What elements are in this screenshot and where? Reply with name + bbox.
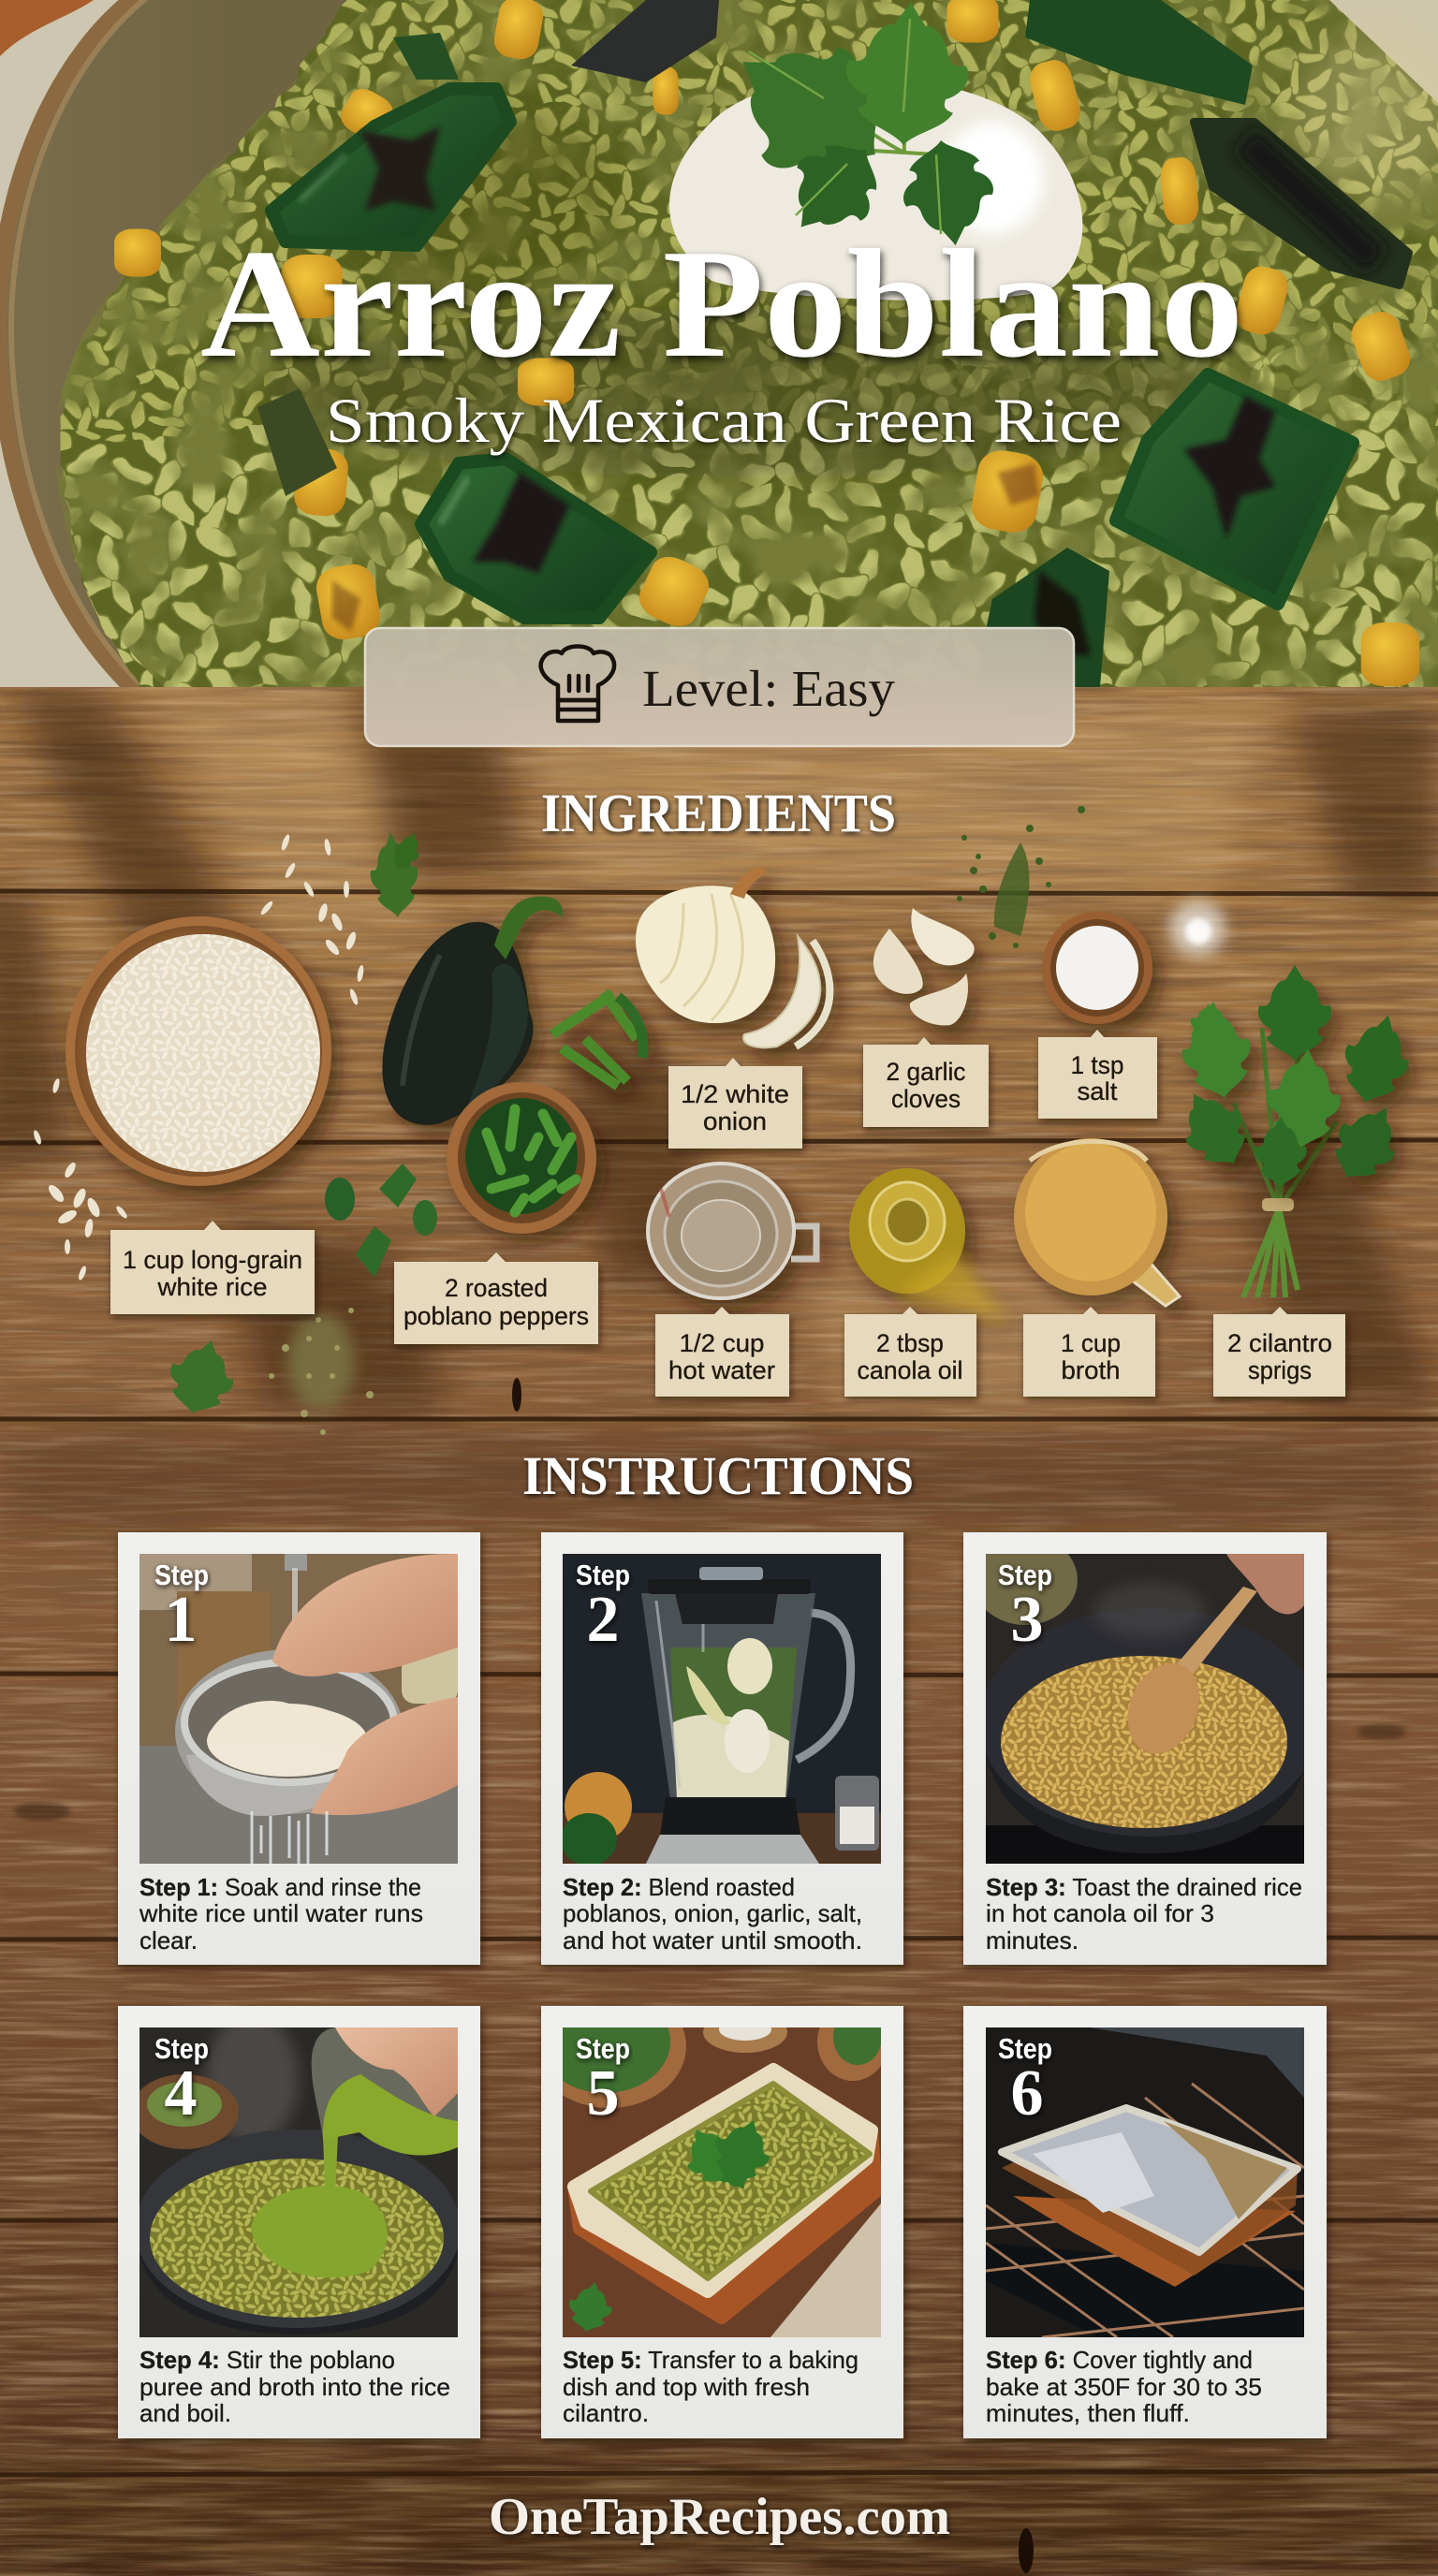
cilantro garnish [703,0,1001,255]
step text: and hot water until smooth. [563,1926,862,1954]
step text: clear. [139,1926,198,1954]
step badge: 6 [1011,2057,1043,2130]
step text: Step 1: Soak and rinse the [139,1873,421,1901]
level text: Level: Easy [642,660,896,717]
canola oil dish [849,1168,1006,1320]
small pepper pieces [325,1164,437,1278]
label: broth [1023,1307,1155,1397]
corn kernels [114,0,1419,689]
hero photo: green rice bowl [0,0,1438,739]
step 1 card [118,1532,480,1965]
step badge: Step [154,2032,209,2065]
step badge [154,2032,209,2130]
label: hot water: hot water [668,1356,775,1384]
label: canola oil [844,1307,976,1397]
ingredient photos [32,806,1420,1435]
ingredient labels [110,1030,1345,1397]
measuring cup of water [648,1164,816,1298]
label: salt [1038,1030,1157,1119]
step text: Step 6: Cover tightly and [986,2346,1253,2374]
footer website: OneTapRecipes.com [489,2488,950,2546]
label: poblano: 2 roasted [445,1274,548,1302]
label: onion: onion [703,1107,767,1135]
broth cup [1014,1138,1180,1306]
step text: cilantro. [563,2399,649,2427]
label: garlic: 2 garlic [886,1058,966,1086]
step 6 card [963,2006,1327,2438]
label: poblano: poblano peppers [404,1302,589,1330]
step badge: Step [998,1559,1052,1591]
step text: puree and broth into the rice [139,2373,450,2401]
step text: bake at 350F for 30 to 35 [986,2373,1262,2401]
halved onion [636,866,829,1047]
step badge: 4 [165,2057,197,2130]
step text: Step 4: Stir the poblano [139,2346,395,2374]
step badge [154,1559,209,1656]
label: broth: 1 cup [1061,1329,1121,1357]
step badge: Step [154,1559,209,1591]
step text [986,1873,1302,1954]
label: poblano [394,1252,598,1344]
label: salt: 1 tsp [1071,1051,1123,1079]
label: rice [110,1221,315,1314]
sliced chiles [552,992,643,1086]
bowl [0,0,468,693]
photo: rinsing rice [139,1554,458,1864]
photo: blender [563,1554,881,1864]
step text: minutes. [986,1926,1078,1954]
label: onion: 1/2 white [681,1080,789,1108]
step text: and boil. [139,2399,231,2427]
label: cilantro [1213,1307,1345,1397]
sour cream dollop [669,77,1082,300]
step 2 card [541,1532,903,1965]
step badge: 1 [165,1584,197,1656]
label: canola oil: canola oil [858,1356,962,1384]
roasted poblano pepper [382,897,563,1125]
step badge: 5 [586,2057,620,2130]
step text [986,2346,1262,2427]
rice bowl [66,916,331,1186]
label: hot water [655,1307,789,1397]
label: onion [668,1058,802,1149]
instructions heading: INSTRUCTIONS [522,1445,914,1506]
step text [563,1873,862,1954]
step badge: 2 [586,1584,620,1656]
photo: baking dish [563,2027,881,2337]
step badge: Step [576,2032,630,2065]
icon: chef hat [541,646,614,721]
step 4 card [118,2006,480,2438]
photo: toasting rice [986,1554,1304,1864]
label: salt: salt [1077,1077,1118,1105]
photo: stirring puree [139,2027,458,2337]
step text: in hot canola oil for 3 [986,1899,1214,1927]
label: cilantro: 2 cilantro [1227,1329,1332,1357]
step 3 card [963,1532,1327,1965]
salt bowl [1042,912,1152,1024]
step badge: 3 [1011,1584,1043,1656]
ingredients heading: INGREDIENTS [541,783,896,843]
step text: Step 2: Blend roasted [563,1873,795,1901]
step badge [576,2032,630,2130]
green rice mass [61,0,1438,739]
step text [139,2346,450,2427]
photo: oven with foil [986,2027,1304,2337]
step text [563,2346,858,2427]
step badge [576,1559,630,1656]
title: Arroz Poblano [200,217,1243,389]
scattered rice and herbs [32,806,1225,1435]
step badge [998,2032,1052,2130]
subtitle: Smoky Mexican Green Rice [326,385,1122,456]
step badge [998,1559,1052,1656]
step text: white rice until water runs [139,1899,423,1927]
step badge: Step [998,2032,1052,2065]
label: garlic [863,1037,989,1127]
step 5 card [533,1984,903,2438]
step text: Step 5: Transfer to a baking [563,2346,858,2374]
step text: poblanos, onion, garlic, salt, [563,1899,862,1927]
label: rice: 1 cup long-grain [123,1246,302,1274]
label: hot water: 1/2 cup [680,1329,764,1357]
step text: Step 3: Toast the drained rice [986,1873,1302,1901]
label: cilantro: sprigs [1248,1356,1312,1384]
garlic cloves [873,908,975,1025]
cilantro bunch [1167,964,1420,1297]
label: broth: broth [1062,1356,1120,1384]
level badge [365,628,1074,746]
chopped peppers bowl [447,1082,596,1234]
label: canola oil: 2 tbsp [876,1329,944,1357]
label: rice: white rice [156,1273,268,1301]
roasted poblano chunks [257,0,1409,687]
step text: minutes, then fluff. [986,2399,1190,2427]
label: garlic: cloves [891,1085,961,1113]
step badge: Step [576,1559,630,1591]
step text: dish and top with fresh [563,2373,810,2401]
step text [139,1873,423,1954]
